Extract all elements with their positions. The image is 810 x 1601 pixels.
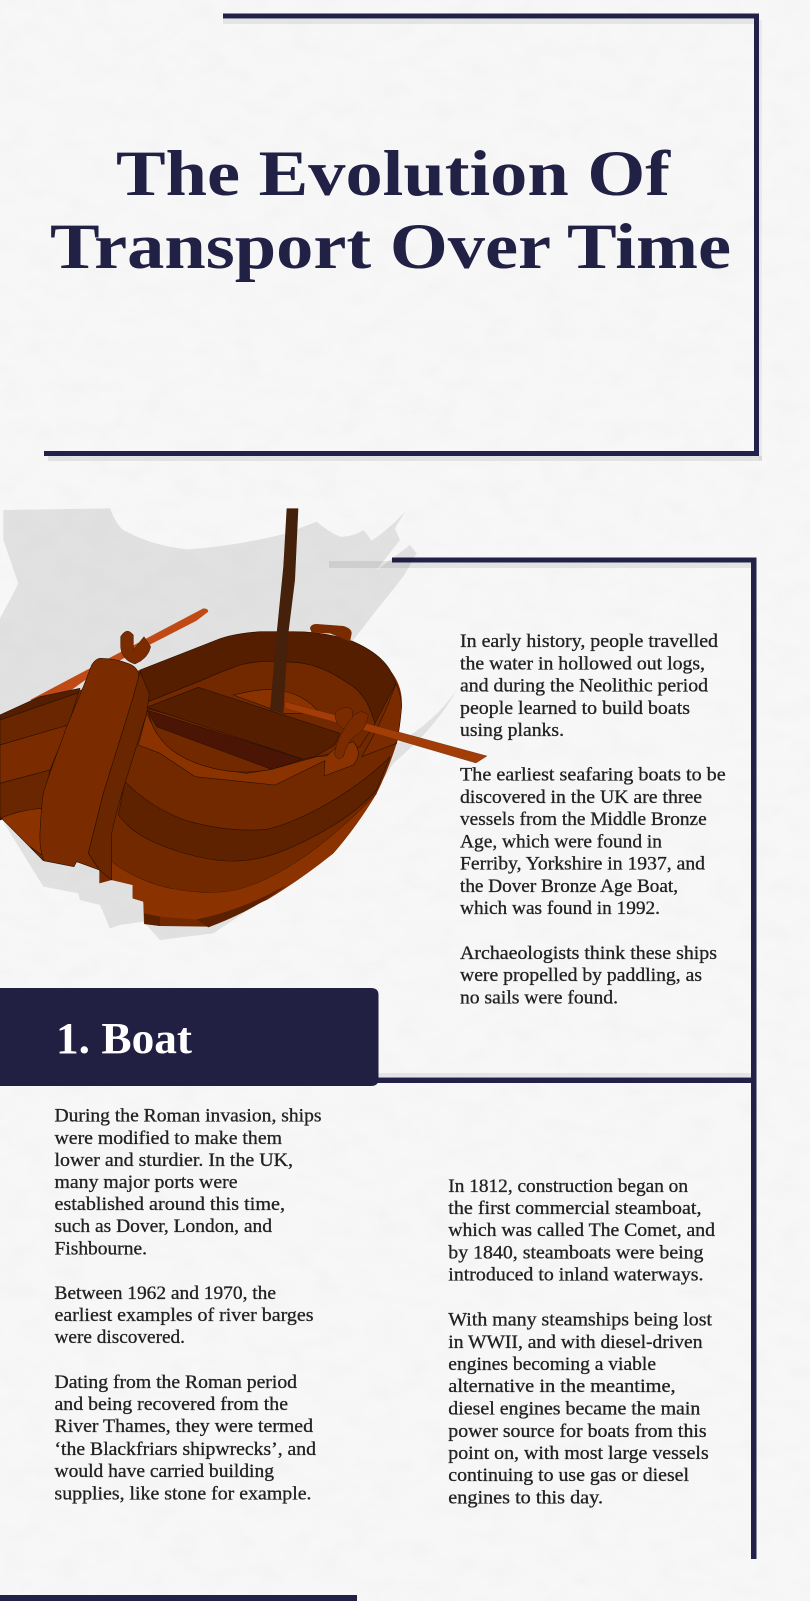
text block: Roman ships: ‘the Blackfriars shipwrecks’, and (54, 1439, 317, 1460)
text block: steamboats and diesel: engines becoming a viable (448, 1354, 656, 1375)
oar: front (285, 702, 487, 763)
text block: steamboats and diesel: which was called The Comet, and (448, 1220, 716, 1241)
hull dark band (118, 757, 390, 861)
boat shadow (0, 508, 457, 940)
text block: early history: Archaeologists think these ships (460, 943, 717, 964)
illustration: wooden boat (0, 508, 487, 940)
text block: Roman ships: earliest examples of river barges (54, 1305, 314, 1326)
hull bottom band (112, 793, 377, 921)
text block: Roman ships: established around this time, (54, 1194, 285, 1215)
rowlock knots (121, 631, 368, 759)
text block: Roman ships: were modified to make them (54, 1128, 282, 1149)
stern tab (310, 624, 352, 642)
text block: early history: the Dover Bronze Age Boat, (460, 876, 678, 897)
text block: steamboats and diesel: In 1812, construction began on (448, 1176, 689, 1197)
text block: Roman ships: many major ports were (54, 1172, 238, 1193)
text block: Roman ships: such as Dover, London, and (54, 1216, 273, 1237)
interior (147, 661, 375, 757)
text block: early history: Ferriby, Yorkshire in 1937, and (460, 854, 706, 875)
text block: early history: which was found in 1992. (460, 898, 660, 919)
next section rule (0, 1595, 357, 1601)
text block: steamboats and diesel: by 1840, steamboats were being (448, 1242, 704, 1264)
text block: early history: were propelled by paddling, as (460, 965, 702, 986)
title: The Evolution Of (116, 138, 672, 210)
front stem (40, 658, 139, 870)
text block: early history: people learned to build boats (460, 698, 690, 719)
text block: steamboats and diesel: With many steamships being lost (448, 1310, 713, 1331)
mast (270, 508, 298, 713)
text block: Roman ships: lower and sturdier. In the UK, (54, 1150, 293, 1171)
text block: Roman ships (54, 1106, 322, 1504)
text block: early history: no sails were found. (460, 987, 618, 1008)
section banner: 1. Boat (0, 988, 378, 1086)
title frame (44, 16, 762, 461)
rim band (140, 632, 396, 723)
text block: steamboats and diesel: engines to this day. (448, 1488, 603, 1509)
text block: early history: using planks. (460, 720, 564, 741)
hull medium band outline (112, 793, 377, 893)
lip (138, 713, 358, 785)
title: Transport Over Time (50, 211, 731, 283)
text block: early history (460, 631, 726, 1008)
text block: early history: the water in hollowed out logs, (460, 653, 705, 674)
text block: early history: and during the Neolithic period (460, 676, 709, 697)
left planks (0, 688, 80, 720)
text block: early history: The earliest seafaring boats to be (460, 765, 726, 786)
stern gunwale (362, 683, 402, 757)
banner heading: 1. Boat (56, 1014, 192, 1063)
text block: Roman ships: Fishbourne. (54, 1238, 147, 1260)
floor (148, 712, 300, 772)
text block: steamboats and diesel: power source for boats from this (448, 1421, 707, 1442)
text block: steamboats and diesel: continuing to use gas or diesel (448, 1465, 689, 1486)
text block: Roman ships: were discovered. (54, 1327, 185, 1348)
text block: early history: vessels from the Middle Bronze (460, 809, 707, 830)
text block: Roman ships: Dating from the Roman period (54, 1372, 298, 1393)
text block: steamboats and diesel: alternative in the meantime, (448, 1376, 676, 1397)
text block: Roman ships: supplies, like stone for example. (54, 1484, 312, 1504)
text block: steamboats and diesel: diesel engines became the main (448, 1399, 701, 1420)
text block: Roman ships: and being recovered from the (54, 1394, 288, 1415)
text block: Roman ships: would have carried building (54, 1461, 275, 1482)
title (50, 138, 731, 283)
hull (0, 624, 402, 927)
section frame: boat (329, 558, 756, 1559)
text block: steamboats and diesel: introduced to inland waterways. (448, 1265, 704, 1286)
text block: early history: discovered in the UK are three (460, 787, 702, 808)
text block: early history: Age, which were found in (460, 831, 663, 852)
text block: steamboats and diesel: point on, with most large vessels (448, 1443, 709, 1464)
text block: steamboats and diesel: the first commercial steamboat, (448, 1198, 702, 1219)
text block: Roman ships: During the Roman invasion, ships (54, 1106, 322, 1127)
text block: Roman ships: Between 1962 and 1970, the (54, 1283, 276, 1304)
text block: Roman ships: River Thames, they were termed (54, 1416, 314, 1437)
text block: early history: In early history, people travelled (460, 631, 719, 652)
text block: steamboats and diesel (448, 1176, 716, 1509)
bench (147, 687, 340, 759)
text block: steamboats and diesel: in WWII, and with diesel-driven (448, 1332, 703, 1353)
oar: rear (30, 608, 208, 702)
